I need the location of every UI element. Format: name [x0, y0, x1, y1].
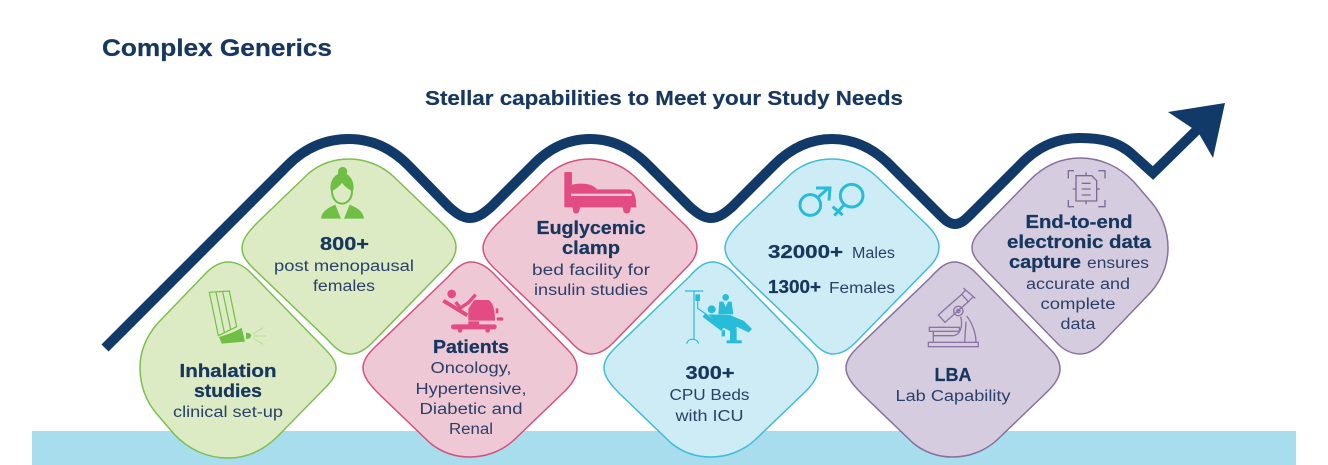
subtitle: Stellar capabilities to Meet your Study Needs [425, 87, 903, 110]
panel: males and females [725, 159, 939, 354]
panel: CPU beds: with ICU [674, 408, 744, 425]
description: Hypertensive, [416, 381, 526, 398]
panel: LBA [846, 262, 1060, 457]
icon: woman [321, 167, 364, 219]
icon: bed [564, 172, 636, 213]
stat: females [768, 277, 895, 297]
description: ensures [1087, 255, 1149, 272]
description: clinical set-up [173, 404, 283, 421]
icon: gender symbols [800, 184, 863, 216]
stat: 800+ [320, 234, 369, 254]
heading: End-to-end [1026, 212, 1132, 232]
panel: patients [363, 262, 577, 457]
stat: females: Females [829, 280, 895, 297]
title: Complex Generics [102, 35, 332, 62]
panel: electronic data capture [972, 158, 1168, 354]
panel: post menopausal females [242, 159, 456, 354]
icon: inhaler [209, 291, 266, 344]
panel: euglycemic clamp: insulin studies [534, 282, 648, 299]
description: Lab Capability [896, 388, 1011, 405]
description: bed facility for [532, 262, 650, 279]
growth arrow [105, 103, 1225, 348]
heading: Euglycemic [536, 218, 646, 238]
panel: CPU beds [604, 262, 818, 457]
panel: electronic data capture: electronic data [1007, 232, 1152, 252]
heading: Patients [433, 337, 509, 357]
stat: females: 1300+ [768, 277, 821, 297]
stat: males [768, 242, 895, 262]
panel: post menopausal females: females [313, 278, 375, 295]
description: complete [1040, 296, 1116, 313]
panel: euglycemic clamp [483, 159, 697, 354]
base band [32, 431, 1296, 465]
description: CPU Beds [670, 387, 750, 404]
description: Diabetic and [420, 401, 522, 418]
panel: electronic data capture: capture [1009, 252, 1081, 272]
panel: euglycemic clamp: clamp [562, 238, 620, 258]
heading: LBA [934, 365, 972, 385]
stat: males: 32000+ [768, 242, 843, 262]
description: Renal [449, 421, 493, 438]
icon: ICU bed with doctor [685, 291, 752, 344]
stat: 300+ [686, 363, 734, 383]
icon: data capture document [1068, 171, 1105, 207]
description: post menopausal [274, 258, 414, 275]
heading: Inhalation [180, 361, 276, 381]
panel: inhalation studies [140, 262, 336, 458]
description: data [1060, 316, 1096, 333]
panel: inhalation studies: studies [194, 381, 262, 401]
description [1026, 255, 1149, 333]
description: accurate and [1026, 276, 1130, 293]
stat: males: Males [852, 245, 895, 262]
description [416, 360, 526, 438]
description: Oncology, [430, 360, 512, 377]
icon: patient on table [443, 290, 503, 333]
icon: microscope [928, 288, 978, 347]
